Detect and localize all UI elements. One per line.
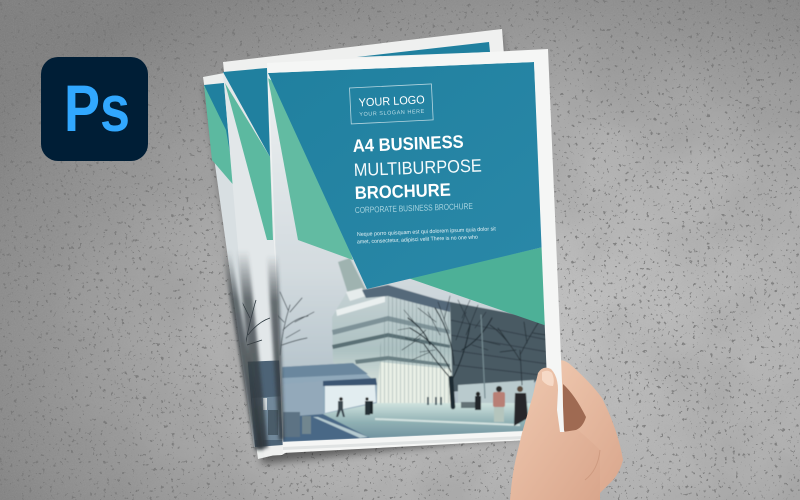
- brochure stack shadow: [205, 35, 565, 464]
- right tree and lamp: [481, 315, 546, 398]
- pavilion: [282, 363, 377, 418]
- front brochure: [267, 49, 566, 453]
- hand: thumb and palm in front: [510, 368, 600, 500]
- logo box: YOUR LOGO: [358, 94, 425, 110]
- spine shadow: [267, 255, 284, 440]
- headline: Multiburpose: MULTIBURPOSE: [353, 156, 482, 180]
- people: [336, 386, 528, 426]
- left tree: [272, 292, 314, 355]
- logo box: [349, 84, 433, 124]
- cover photo: [268, 62, 549, 442]
- body copy: Neque porro quisquam est qui dolorem ipsum quia dolor sit: [357, 226, 496, 238]
- large tree: [398, 296, 500, 407]
- subtitle: CORPORATE BUSINESS BROCHURE: [355, 201, 473, 215]
- green overlay shapes: [408, 247, 547, 326]
- logo box: YOUR SLOGAN HERE: [359, 109, 425, 118]
- Photoshop app icon: Ps: [64, 71, 130, 145]
- spine shadow stripes of stacked brochures: [222, 250, 268, 450]
- Photoshop app icon: [41, 57, 148, 161]
- headline: Brochure: BROCHURE: [354, 180, 451, 203]
- body copy: amet, consectetur, adipisci velit There is no one who: [357, 235, 478, 245]
- left benches: [283, 412, 300, 437]
- headline: A4 Business: A4 BUSINESS: [352, 132, 464, 156]
- middle brochure: [223, 29, 504, 456]
- plaza ground: [322, 402, 530, 440]
- back brochure: [203, 71, 275, 459]
- hand: fingers behind brochure: [540, 360, 623, 500]
- middle brochure photo strip: [242, 300, 283, 447]
- body copy: [357, 226, 496, 245]
- dark neighbouring building: [440, 300, 549, 392]
- glass office building: [332, 258, 453, 403]
- paper sheet: [267, 49, 566, 453]
- blue cover panel: [268, 62, 543, 289]
- sky: [269, 76, 536, 430]
